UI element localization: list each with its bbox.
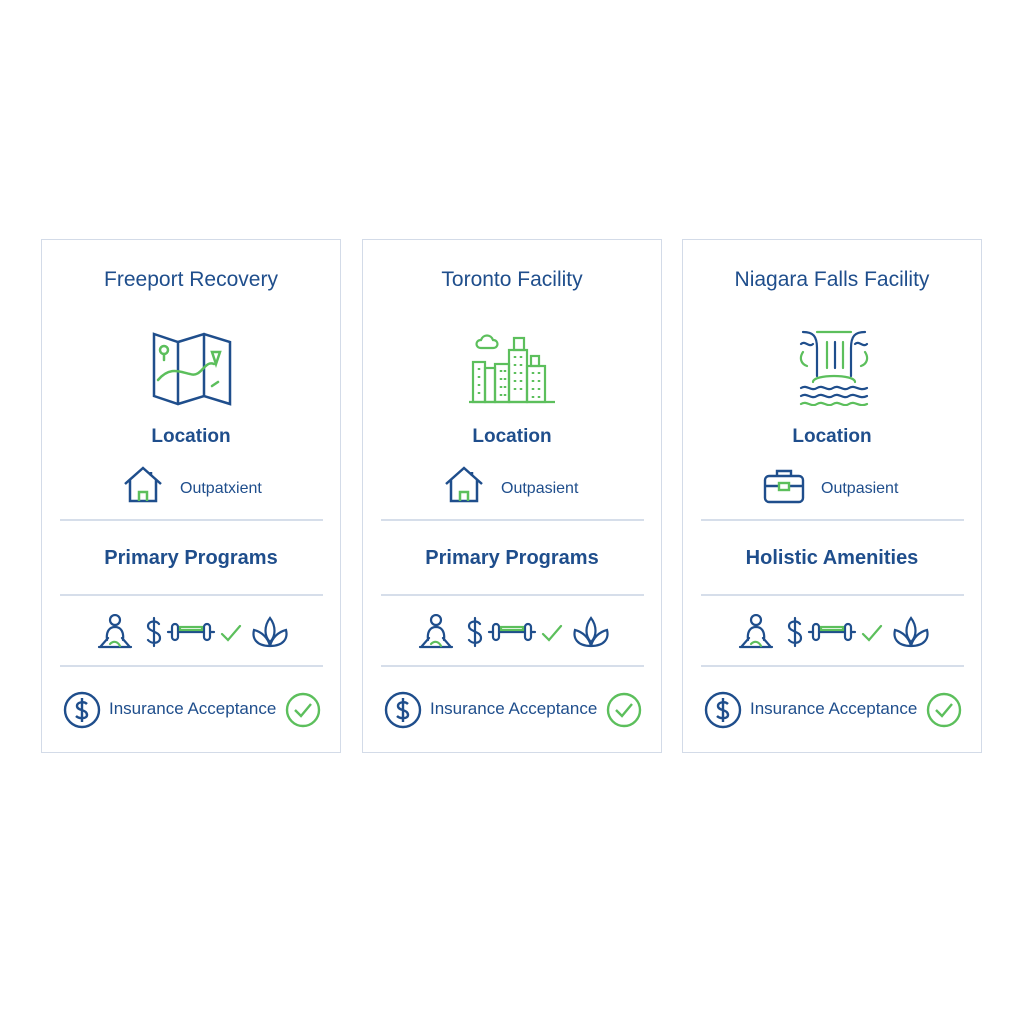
icon: house	[124, 466, 162, 502]
icon row: amenities	[738, 614, 929, 648]
heading: Location: Location	[472, 426, 552, 447]
icon: city buildings	[469, 334, 555, 404]
heading: Primary Programs: Primary Programs	[104, 547, 278, 569]
title: Freeport Recovery	[104, 268, 278, 291]
icon: folded map	[152, 332, 232, 406]
heading: Location: Location	[792, 426, 872, 447]
title: Toronto Facility	[441, 268, 583, 291]
icon row: programs	[418, 614, 609, 648]
title: Niagara Falls Facility	[735, 268, 929, 291]
card: Freeport Recovery	[41, 239, 341, 753]
text: outpatient: Outpasient	[501, 480, 578, 497]
text: outpatient: Outpatxient	[180, 480, 262, 497]
heading: Location: Location	[151, 426, 231, 447]
icon: check circle	[606, 692, 642, 728]
icon: briefcase	[764, 470, 804, 504]
icon: dollar circle	[64, 692, 100, 728]
icon: house	[445, 466, 483, 502]
heading: Holistic Amenities: Holistic Amenities	[746, 547, 918, 569]
icon: dollar circle	[704, 692, 742, 728]
icon: waterfall	[800, 330, 868, 406]
text: outpatient: Outpasient	[821, 480, 898, 497]
icon: check circle	[926, 692, 962, 728]
icon row: programs	[98, 614, 288, 648]
text: insurance: Insurance Acceptance	[750, 699, 917, 718]
card: Toronto Facility	[362, 239, 662, 753]
text: insurance: Insurance Acceptance	[109, 699, 276, 718]
card: Niagara Falls Facility	[682, 239, 982, 753]
icon: check circle	[286, 692, 320, 728]
text: insurance: Insurance Acceptance	[430, 699, 597, 718]
heading: Primary Programs: Primary Programs	[425, 547, 599, 569]
icon: dollar circle	[384, 692, 422, 728]
